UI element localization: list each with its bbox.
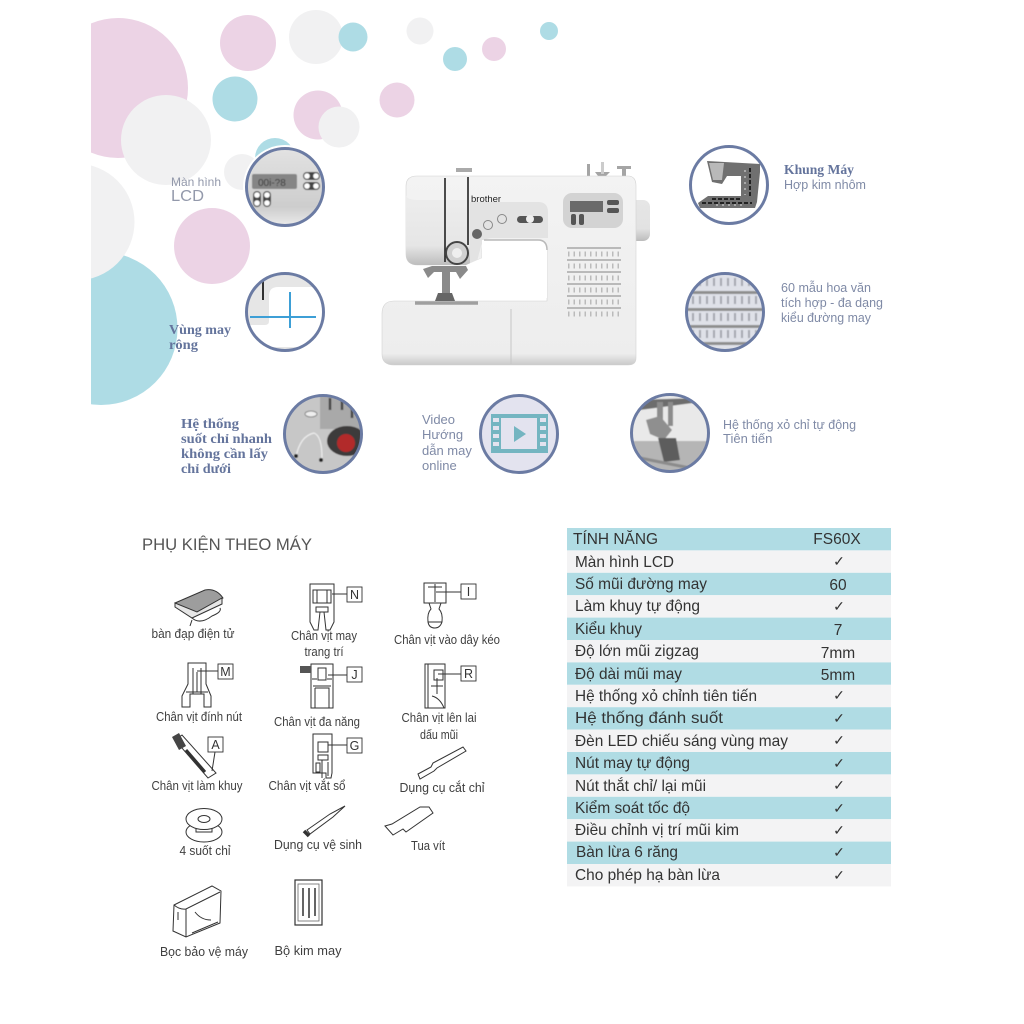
accessory: foot N [291, 584, 362, 659]
accessory: foot J: J [351, 668, 358, 682]
table text: Nút thắt chỉ/ lại mũi [575, 776, 706, 795]
table text: Độ lớn mũi zigzag [575, 643, 699, 660]
label: video guide: online [422, 458, 457, 473]
callout: LCD screen: 00i-?8 [258, 178, 286, 189]
label: aluminium frame [784, 162, 866, 192]
accessory: cleaning brush: Dụng cụ vệ sinh [274, 838, 362, 852]
table text: ✓ [833, 867, 845, 883]
label: stitch patterns: 60 mẫu hoa văn [781, 280, 871, 295]
accessory: foot I [394, 583, 500, 647]
accessory: foot I: Chân vịt vào dây kéo [394, 633, 500, 647]
table text: Hệ thống xỏ chỉnh tiên tiến [575, 688, 757, 705]
callout: quick bobbin system [284, 395, 367, 475]
accessory: foot N: Chân vịt may [291, 629, 358, 643]
accessory: needle set: Bộ kim may [274, 944, 342, 958]
label: stitch patterns: kiểu đường may [781, 310, 871, 325]
table: features [567, 528, 891, 886]
callout: stitch patterns [686, 273, 766, 353]
table text: ✓ [833, 553, 845, 569]
label: video guide [422, 412, 472, 473]
accessory: foot M: Chân vịt đính nút [156, 710, 242, 724]
heading: accessories: PHỤ KIỆN THEO MÁY [142, 535, 312, 554]
table text: ✓ [833, 598, 845, 614]
label: LCD screen [171, 175, 221, 205]
table text: ✓ [833, 777, 845, 793]
label: quick bobbin system: chỉ dưới [181, 461, 231, 476]
table text [573, 529, 861, 884]
accessory: foot G: Chân vịt vắt sổ [268, 778, 346, 793]
label: wide sewing area: Vùng may [169, 322, 231, 337]
label: stitch patterns [781, 280, 883, 325]
accessory: screwdriver: Tua vít [411, 839, 445, 853]
label: auto threader [723, 417, 856, 446]
accessory: foot J: Chân vịt đa năng [274, 715, 360, 729]
table text: ✓ [833, 755, 845, 771]
decorative bubbles background [0, 0, 558, 420]
table text: 5mm [821, 667, 855, 684]
table text: Hệ thống đánh suốt [575, 710, 724, 727]
accessory: foot G: G [350, 739, 359, 753]
label: auto threader: Hệ thống xỏ chỉ tự động [723, 417, 856, 432]
callout: auto threader [631, 394, 711, 474]
accessory: foot M: M [220, 665, 231, 679]
table text: Kiểu khuy [575, 620, 642, 638]
table text: 7mm [821, 645, 855, 662]
table text: TÍNH NĂNG [573, 529, 658, 548]
label: video guide: Hướng [422, 427, 463, 442]
table text: FS60X [813, 531, 861, 548]
icon: video film strip [480, 396, 558, 472]
table text: ✓ [833, 822, 845, 838]
accessory: cleaning brush [274, 806, 362, 852]
table text: Điều chỉnh vị trí mũi kim [575, 822, 739, 839]
accessory: foot A [152, 733, 243, 793]
accessory: foot M [156, 663, 242, 724]
sewing machine: brother [471, 194, 501, 205]
accessory: screwdriver [385, 807, 445, 853]
label: stitch patterns: tích hợp - đa dạng [781, 295, 883, 310]
label: wide sewing area [169, 322, 231, 352]
table text: ✓ [833, 732, 845, 748]
accessory: foot A: Chân vịt làm khuy [152, 779, 243, 793]
table rows [567, 528, 891, 886]
label: video guide: dẫn may [422, 443, 472, 458]
accessory: foot J [274, 664, 362, 729]
sewing machine [382, 162, 650, 365]
accessory: foot R: Chân vịt lên lai [402, 711, 476, 725]
table text: 60 [829, 577, 847, 594]
accessory: needle set [274, 880, 342, 958]
table text: Đèn LED chiếu sáng vùng may [575, 733, 788, 750]
accessory: foot G [268, 734, 362, 793]
table text: 7 [834, 622, 842, 639]
callout: aluminium frame [690, 146, 768, 224]
accessory: foot I: I [467, 585, 470, 599]
accessory: dust cover: Bọc bảo vệ máy [160, 945, 249, 959]
label: quick bobbin system [181, 416, 273, 476]
table text: Độ dài mũi may [575, 666, 682, 683]
table text: Làm khuy tự động [575, 598, 700, 615]
accessory: seam ripper [400, 747, 485, 795]
callout: wide sewing area [245, 272, 328, 352]
table text: ✓ [833, 687, 845, 703]
accessory: bobbins: 4 suốt chỉ [180, 844, 231, 858]
table text: ✓ [833, 800, 845, 816]
table text: Màn hình LCD [575, 554, 674, 571]
accessory: dust cover [160, 886, 249, 959]
table text: Số mũi đường may [575, 576, 707, 593]
table text: Cho phép hạ bàn lừa [575, 867, 720, 884]
table text: Nút may tự động [575, 755, 690, 772]
label: wide sewing area: rộng [169, 337, 198, 352]
accessory: bobbins [180, 808, 231, 858]
label: quick bobbin system: suốt chỉ nhanh [181, 431, 273, 446]
accessory: foot pedal [152, 590, 234, 641]
accessory: foot N: N [350, 588, 359, 602]
accessory: foot N: trang trí [304, 645, 344, 659]
accessory: seam ripper: Dụng cụ cắt chỉ [400, 780, 485, 795]
accessory: foot pedal: bàn đạp điện tử [152, 627, 234, 641]
label: aluminium frame: Khung Máy [784, 162, 854, 177]
label: video guide: Video [422, 412, 455, 427]
label: quick bobbin system: không cần lấy [181, 446, 268, 461]
table text: Bàn lừa 6 răng [576, 844, 678, 861]
table text: Kiểm soát tốc độ [575, 799, 690, 817]
accessory: foot R [402, 664, 476, 742]
label: quick bobbin system: Hệ thống [181, 416, 239, 431]
label: LCD screen: LCD [171, 188, 204, 205]
label: auto threader: Tiên tiến [723, 431, 772, 446]
table text: ✓ [833, 710, 845, 726]
accessory: foot A: A [211, 738, 220, 752]
table text: ✓ [833, 844, 845, 860]
accessory: foot R: dấu mũi [420, 728, 458, 742]
label: LCD screen: Màn hình [171, 175, 221, 189]
accessory: foot R: R [464, 667, 473, 681]
label: aluminium frame: Hợp kim nhôm [784, 177, 866, 192]
callout: LCD screen [245, 147, 325, 227]
